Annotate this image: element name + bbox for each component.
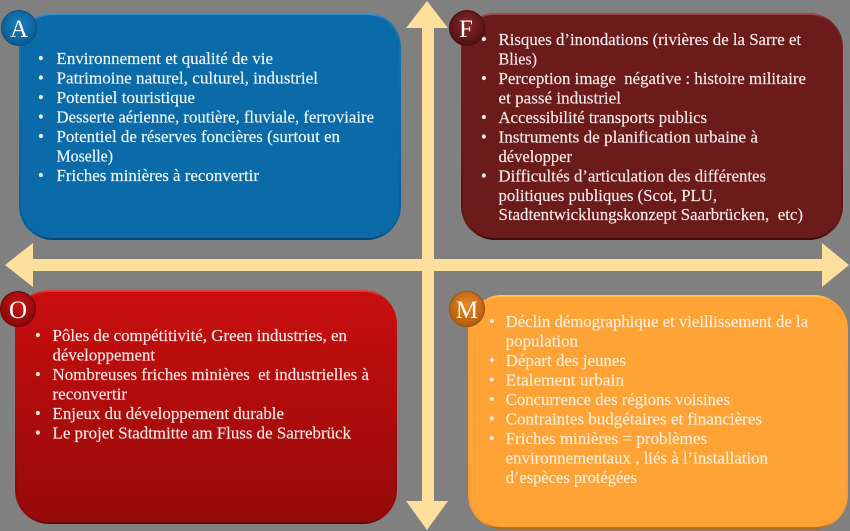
list O: • [35,404,41,423]
badge M [450,292,484,326]
badge A [2,10,36,46]
badge O [0,292,36,326]
list A: Friches minières à reconvertir [56,166,260,185]
panel A: atouts [2,10,401,240]
list O: Le projet Stadtmitte am Fluss de Sarrebrück [52,424,352,442]
list F: Perception image négative : histoire militaire [498,69,806,88]
list A: • [38,49,44,68]
badge M: M [456,297,478,324]
list M: • [489,312,495,331]
list M [489,312,809,487]
list O: • [35,424,41,442]
horizontal double arrow [5,243,849,287]
list F: • [481,69,487,88]
list O: Enjeux du développement durable [52,404,284,423]
list F: Accessibilité transports publics [498,108,707,127]
list F: Instruments de planification urbaine à [498,128,759,146]
panel M: menaces [450,292,848,529]
list M: • [489,370,495,390]
list F: Stadtentwicklungskonzept Saarbrücken, etc) [498,205,803,224]
list M: • [489,390,495,409]
list O: développement [52,346,155,364]
list A: • [38,127,44,146]
badge F [450,10,484,46]
list A: Desserte aérienne, routière, fluviale, ferroviaire [56,108,374,126]
list F: développer [498,147,572,166]
badge O: O [9,297,27,324]
list M: • [489,429,495,448]
list O: • [35,365,41,384]
panel F: faiblesses [450,10,843,240]
panel O: opportunités [0,290,397,524]
list F: • [481,128,487,146]
list M: • [489,351,495,370]
list F: Difficultés d’articulation des différentes [498,166,766,186]
list F: • [481,30,487,49]
list F: Blies) [498,50,537,68]
list M: Déclin démographique et vieillissement de la [506,312,809,331]
list M: population [506,332,578,350]
list M: • [489,410,495,428]
list M: Départ des jeunes [506,351,626,370]
list M: Etalement urbain [506,370,624,390]
list A: Potentiel touristique [56,88,195,107]
list A: Moselle) [56,146,113,166]
vertical double arrow [406,1,448,530]
list F: • [481,108,487,127]
list F: et passé industriel [498,88,621,108]
list A: • [38,88,44,107]
list O: • [35,326,41,345]
list O [35,326,370,442]
list M: Concurrence des régions voisines [506,390,730,409]
list O: reconvertir [52,384,128,404]
list M: Friches minières = problèmes [506,429,707,448]
list A [38,49,374,185]
list F [481,30,806,224]
list O: Pôles de compétitivité, Green industries, en [52,326,347,345]
list A: Patrimoine naturel, culturel, industriel [56,68,318,88]
list A: • [38,68,44,88]
list M: d’espèces protégées [506,468,637,487]
list M: environnementaux , liés à l’installation [506,448,768,468]
list O: Nombreuses friches minières et industrielles à [52,365,370,384]
list A: • [38,166,44,185]
list A: Potentiel de réserves foncières (surtout en [56,127,340,146]
list A: Environnement et qualité de vie [56,49,273,68]
list F: • [481,166,487,186]
list F: Risques d’inondations (rivières de la Sarre et [498,30,801,49]
badge F: F [459,16,473,43]
list M: Contraintes budgétaires et financières [506,410,762,428]
list F: politiques publiques (Scot, PLU, [498,186,717,205]
list A: • [38,108,44,126]
badge A: A [10,16,28,43]
